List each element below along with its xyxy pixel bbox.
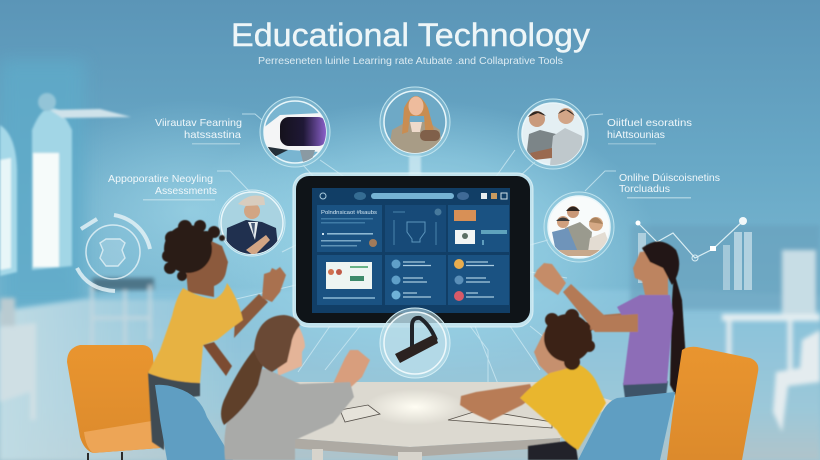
pants [528,440,578,460]
label: virtual learning [155,117,242,144]
icon circle: smiling woman [380,87,450,157]
forearm and hand [332,350,370,388]
curly hair [162,220,225,281]
tablet bezel [296,176,530,323]
yellow shirt [148,283,243,383]
title: Educational Technology [231,17,590,53]
left windows [0,108,72,276]
label: virtual learning: Viirautav Fearning [155,117,242,129]
sweater [224,369,354,460]
left orange chair [67,345,160,460]
label: online discussions: Onlihe Dúiscoisnetins [619,172,720,184]
back arm [590,312,640,332]
icon circle: man in hat [219,190,285,256]
subtitle: Perreseneten luinle Learring rate Atubate .and Collaprative Tools [258,56,563,67]
arms [460,384,535,421]
label: assessments: Assessments [155,185,217,197]
bottom device circle [380,308,450,378]
beam above tablet [409,155,421,177]
label: resources [607,117,692,144]
right orange chair [667,347,758,460]
boy right [460,309,606,460]
card: list one [385,255,446,305]
label: assessments: Appoporatire Neoyling [108,173,213,185]
table [232,382,617,460]
label: resources: Oiitfuel esoratins [607,117,692,129]
hand [262,267,286,302]
ceiling lamp [38,93,131,118]
icon circle: family group [544,192,614,262]
label: online discussions [619,172,720,198]
right blue chair [578,392,675,460]
hair [642,241,679,285]
label: assessments [108,173,217,200]
face [534,332,572,378]
icon circle: two colleagues [518,99,588,169]
girl left [221,315,370,460]
left blue chair [155,385,233,460]
card: list two [448,255,509,305]
screen top bar [320,192,507,200]
yellow shirt [520,365,606,450]
tablet glow frame [293,173,533,327]
card: article summary: Polndnsicaot #lsaubs [321,210,378,216]
book right [448,410,552,428]
card: article summary [317,205,382,252]
book left [340,405,380,422]
card: outline diagram [385,205,446,252]
braid [670,272,686,403]
label: online discussions: Torcluadus [619,183,670,195]
raised arm [234,294,268,338]
lower arm [203,342,232,376]
label: resources: hiAttsounias [607,129,665,141]
right data chart [636,217,752,290]
face [276,325,305,376]
background furniture left [0,278,154,420]
tablet screen [312,188,510,313]
card: media thumbnails [448,205,509,252]
pants [148,372,200,450]
label: virtual learning: hatssastina [184,129,241,141]
icon circle: VR headset [258,97,330,167]
floating tech icon [77,215,150,291]
head hair [254,315,300,372]
tablet [293,173,533,327]
hand [534,263,566,295]
raised arm [563,284,638,332]
neck and face [186,236,228,297]
jeans [623,381,668,398]
connector lines [217,114,616,384]
boy left [148,220,286,450]
face and neck [633,250,668,295]
girl right [534,241,686,403]
background furniture right [722,250,820,432]
purple shirt [617,295,673,385]
curly hair [544,309,595,370]
ponytail [221,345,264,425]
card: slide preview [317,255,382,305]
